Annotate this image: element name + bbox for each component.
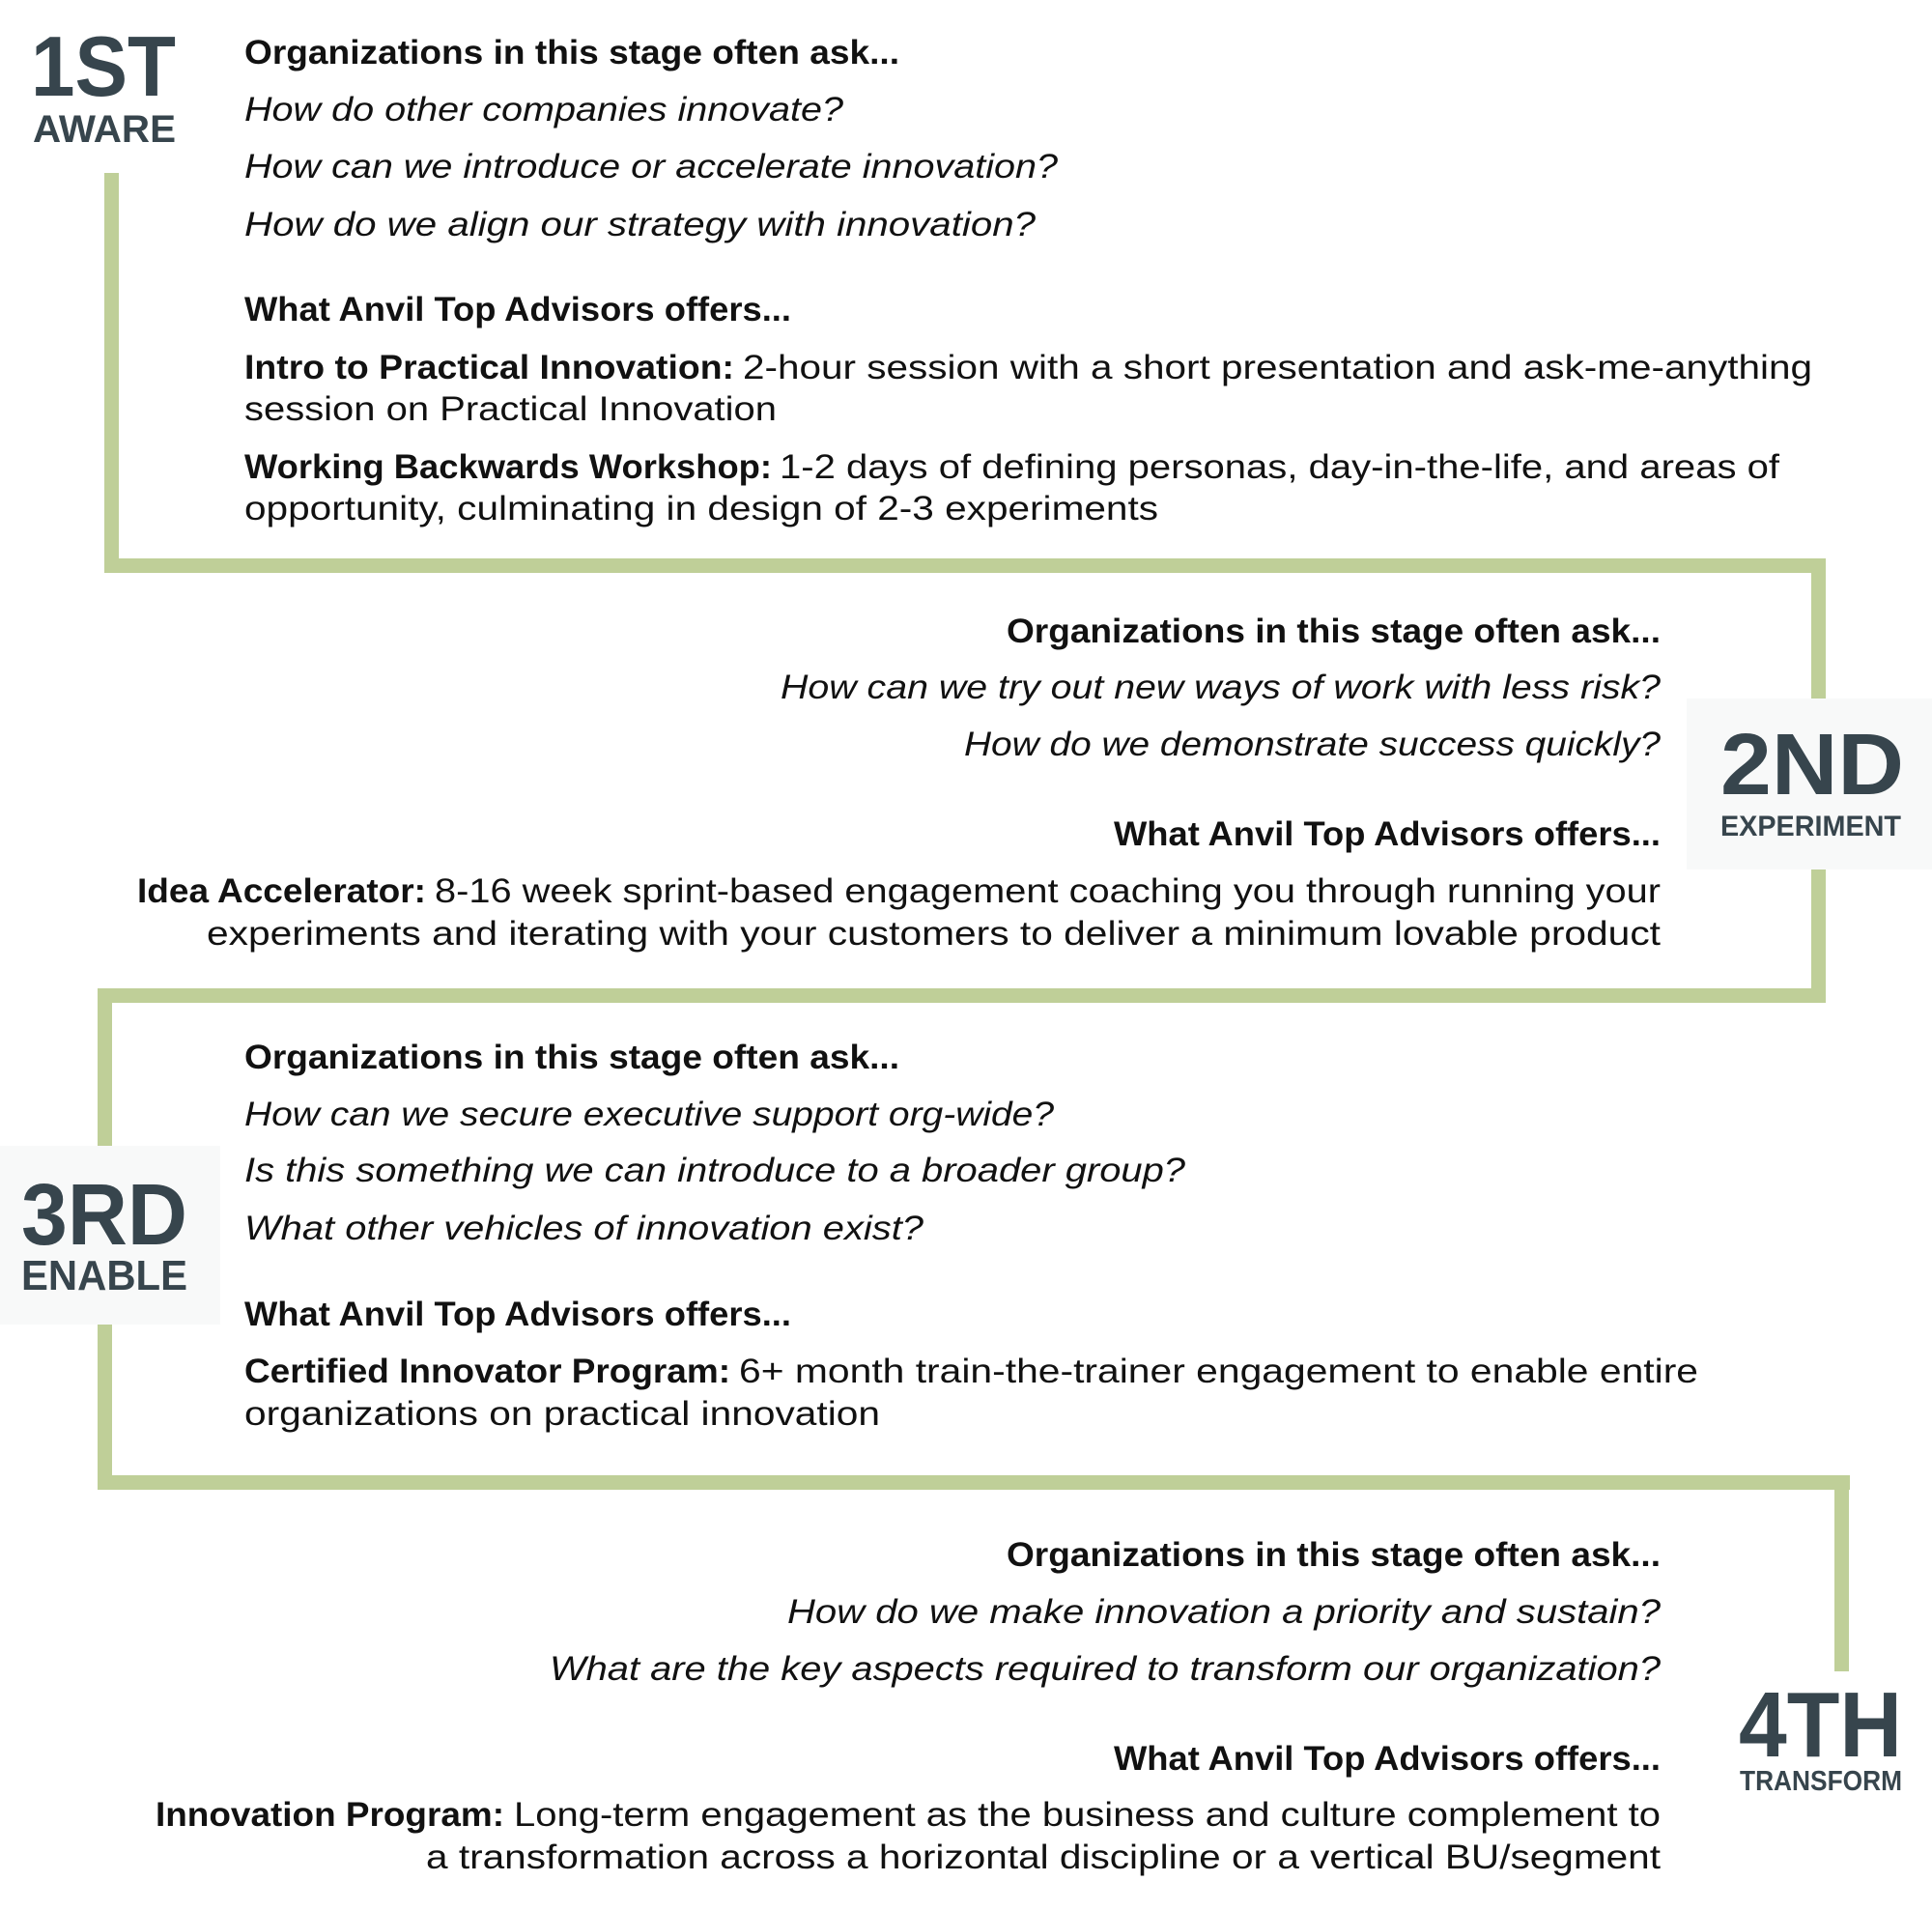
connector path [98,173,1850,1671]
stage 2 text: Idea Accelerator: [137,872,426,910]
stage 2 text: 8-16 week sprint-based engagement coaching you through running your [435,872,1661,910]
stage 4 text: a transformation across a horizontal discipline or a vertical BU/segment [426,1839,1661,1876]
stage 4 text: Organizations in this stage often ask... [1007,1536,1661,1574]
badge: 3rd enable [0,1146,220,1325]
stage 3 text: Certified Innovator Program: [244,1353,730,1390]
stage 1 text: How can we introduce or accelerate innovation? [244,148,1059,185]
stage 1 text: What Anvil Top Advisors offers... [244,291,791,328]
stage 2 text: How can we try out new ways of work with less risk? [781,669,1662,706]
badge: 2nd experiment: EXPERIMENT [1720,811,1901,842]
stage 2 text [137,613,1662,953]
stage 4 text: How do we make innovation a priority and sustain? [787,1593,1662,1631]
stage 3 text: Is this something we can introduce to a broader group? [244,1152,1186,1189]
stage 3 text: Organizations in this stage often ask... [244,1039,899,1076]
stage 1 text: Organizations in this stage often ask... [244,34,899,71]
stage 1 text: Intro to Practical Innovation: [244,349,734,386]
stage 4 text [156,1536,1662,1876]
stage 2 text: What Anvil Top Advisors offers... [1114,815,1661,853]
stage 1 text: How do other companies innovate? [244,91,844,128]
stage 3 text: What other vehicles of innovation exist? [244,1210,924,1247]
stage 4 text: What Anvil Top Advisors offers... [1114,1740,1661,1778]
stage 1 text: How do we align our strategy with innovation? [244,206,1037,243]
badge: 3rd enable: ENABLE [21,1252,187,1299]
stage 4 text: Innovation Program: [156,1796,504,1834]
stage 2 text: experiments and iterating with your customers to deliver a minimum lovable product [207,915,1661,953]
badge: 1st aware: AWARE [33,108,176,151]
badge: 2nd experiment [1687,698,1932,869]
stage 3 text: 6+ month train-the-trainer engagement to enable entire [739,1353,1698,1390]
stage 2 text: How do we demonstrate success quickly? [964,726,1662,763]
stage 3 text: How can we secure executive support org-wide? [244,1096,1055,1133]
stage 1 text: opportunity, culminating in design of 2-3 experiments [244,490,1158,527]
stage 3 text [244,1039,1698,1433]
badge: 2nd experiment: 2ND [1720,717,1904,813]
stage 2 text: Organizations in this stage often ask... [1007,613,1661,650]
stage 4 text: Long-term engagement as the business and culture complement to [514,1796,1661,1834]
stage 1 text: session on Practical Innovation [244,390,777,428]
stage 4 text: What are the key aspects required to transform our organization? [550,1650,1662,1688]
stage 1 text: Working Backwards Workshop: [244,448,772,486]
badge: 4th transform: TRANSFORM [1740,1766,1902,1797]
stage 3 text: organizations on practical innovation [244,1395,880,1433]
stage 1 text [244,34,1812,527]
stage 1 text: 1-2 days of defining personas, day-in-the-life, and areas of [780,448,1779,486]
badge: 3rd enable: 3RD [21,1167,187,1264]
badge: 1st aware: 1ST [31,18,176,114]
badge: 1st aware [31,18,176,151]
stage 1 text: 2-hour session with a short presentation and ask-me-anything [743,349,1812,386]
stage 3 text: What Anvil Top Advisors offers... [244,1296,791,1333]
badge: 4th transform: 4TH [1739,1673,1902,1777]
